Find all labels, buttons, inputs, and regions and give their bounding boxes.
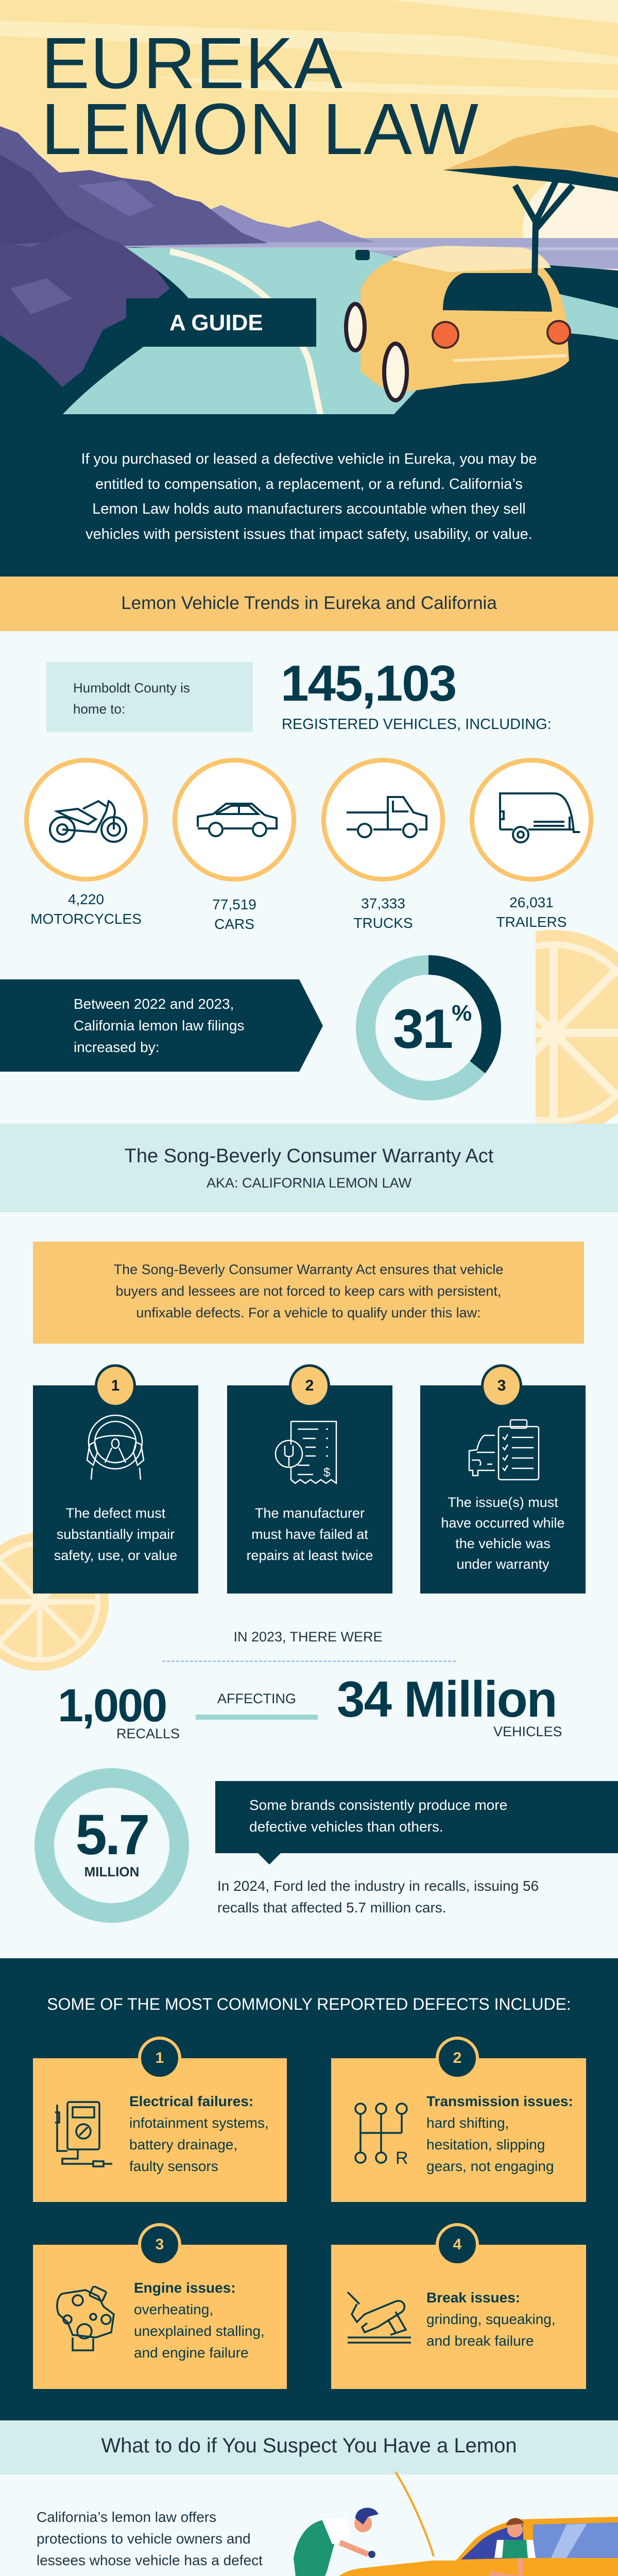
criteria card 3: under warranty xyxy=(456,1556,550,1572)
illustration: mechanic and car xyxy=(294,2471,618,2576)
text: ford recalls: recalls that affected 5.7 million cars. xyxy=(217,1900,447,1916)
callout arrow: filings xyxy=(0,979,323,1072)
intro text: entitled to compensation, a replacement, or a refund. California’s xyxy=(95,476,523,493)
section heading: song-beverly xyxy=(0,1124,618,1212)
recall stats: 34 Million xyxy=(337,1671,557,1727)
badge 4 xyxy=(436,2223,479,2266)
callout arrow: filings: increased by: xyxy=(74,1039,160,1055)
vehicle circles xyxy=(24,758,593,932)
callout arrow: filings: Between 2022 and 2023, xyxy=(74,996,234,1012)
badge 1: 1 xyxy=(156,2049,164,2066)
title xyxy=(41,22,479,170)
recall stats: IN 2023, THERE WERE xyxy=(233,1629,383,1645)
text: ford recalls: In 2024, Ford led the industry in recalls, issuing 56 xyxy=(217,1878,539,1894)
tree xyxy=(515,180,573,281)
humboldt box: Humboldt County is xyxy=(73,680,190,696)
title: LEMON LAW xyxy=(41,88,479,170)
song-beverly description box: buyers and lessees are not forced to keep cars with persistent, xyxy=(116,1283,501,1299)
defect card 2: hard shifting, xyxy=(426,2115,509,2131)
callout arrow: filings: California lemon law filings xyxy=(74,1018,244,1033)
section heading: song-beverly: The Song-Beverly Consumer Warranty Act xyxy=(125,1145,493,1167)
callout: brands: defective vehicles than others. xyxy=(249,1819,443,1835)
vehicle circles: TRAILERS xyxy=(496,914,566,930)
badge 1 xyxy=(95,1364,136,1408)
a guide label xyxy=(126,298,316,347)
icon: engine xyxy=(56,2286,115,2351)
song-beverly description box xyxy=(33,1242,584,1344)
labels: 4,220 xyxy=(68,891,104,907)
intro text: Lemon Law holds auto manufacturers accountable when they sell xyxy=(92,501,526,517)
defect card 3: overheating, xyxy=(134,2301,213,2317)
decoration: lemon slice right xyxy=(536,930,618,1124)
badge 3 xyxy=(138,2223,181,2266)
defect card 4: grinding, squeaking, xyxy=(426,2311,556,2327)
intro text: If you purchased or leased a defective vehicle in Eureka, you may be xyxy=(81,451,537,467)
song-beverly description box: The Song-Beverly Consumer Warranty Act ensures that vehicle xyxy=(114,1262,503,1277)
badge 3: 3 xyxy=(497,1377,506,1394)
recall stats: RECALLS xyxy=(116,1726,180,1741)
badge 1 xyxy=(138,2037,181,2080)
text: lemon law protections: protections to vehicle owners and xyxy=(37,2531,251,2547)
defect card 2: Transmission issues: xyxy=(426,2093,573,2109)
criteria card 1: safety, use, or value xyxy=(54,1548,177,1563)
icon: brake pedal xyxy=(347,2292,411,2344)
recall stats: VEHICLES xyxy=(493,1724,562,1739)
icon: gear shift: R xyxy=(396,2148,408,2168)
icon: steering wheel xyxy=(87,1415,144,1480)
title: EUREKA xyxy=(41,22,343,104)
defects heading: SOME OF THE MOST COMMONLY REPORTED DEFECTS INCLUDE: xyxy=(47,1995,571,2013)
labels: MOTORCYCLES xyxy=(30,911,142,927)
labels xyxy=(30,891,142,927)
stat: registered vehicles xyxy=(281,655,552,733)
icon: multimeter xyxy=(55,2101,112,2167)
defect card 4: and break failure xyxy=(426,2333,534,2349)
defect card 3: unexplained stalling, xyxy=(134,2323,265,2339)
criteria card 3: have occurred while xyxy=(441,1515,565,1531)
vehicle circles: 77,519 xyxy=(212,896,256,912)
intro panel xyxy=(0,414,618,577)
section heading: what to do: What to do if You Suspect You Have a Lemon xyxy=(101,2434,517,2457)
defect card 1: faulty sensors xyxy=(129,2158,218,2174)
section heading: song-beverly: AKA: CALIFORNIA LEMON LAW xyxy=(207,1175,411,1191)
hero illustration xyxy=(0,0,618,414)
text: ford recalls xyxy=(217,1878,539,1916)
defect card 4 xyxy=(331,2245,586,2389)
badge 1: 1 xyxy=(111,1377,119,1394)
defect card 2: gears, not engaging xyxy=(426,2158,554,2174)
a guide label: A GUIDE xyxy=(169,310,263,335)
song-beverly description box: unfixable defects. For a vehicle to qualify under this law: xyxy=(136,1305,481,1320)
panel: common defects xyxy=(0,1958,618,2420)
defect card 4: Break issues: xyxy=(426,2290,520,2306)
criteria card 3 xyxy=(420,1385,586,1594)
defect card 3 xyxy=(33,2245,287,2389)
ring stat 5.7 million: 5.7 xyxy=(76,1803,148,1867)
recall stats xyxy=(58,1629,562,1741)
criteria card 2: must have failed at xyxy=(251,1527,368,1542)
badge 3: 3 xyxy=(156,2236,164,2253)
badge 2 xyxy=(289,1364,330,1408)
defect card 1: Electrical failures: xyxy=(129,2093,253,2109)
section heading: what to do xyxy=(0,2420,618,2475)
intro text xyxy=(81,451,537,542)
icon: trailer xyxy=(470,758,593,882)
stat: registered vehicles: REGISTERED VEHICLES, INCLUDING: xyxy=(282,716,552,733)
badge 2: 2 xyxy=(453,2049,461,2066)
criteria card 1 xyxy=(33,1385,198,1594)
recall stats: AFFECTING xyxy=(217,1691,296,1706)
icon: car xyxy=(173,758,296,882)
defect card 2: hesitation, slipping xyxy=(426,2137,545,2153)
defect card 3: Engine issues: xyxy=(134,2280,236,2296)
ring stat 5.7 million: MILLION xyxy=(84,1864,139,1879)
icon: gear shift xyxy=(354,2103,408,2168)
car xyxy=(360,255,569,393)
badge 3 xyxy=(481,1364,522,1408)
donut chart 31%: 31% xyxy=(393,997,470,1060)
text: lemon law protections: California’s lemon law offers xyxy=(37,2509,216,2525)
donut chart 31% xyxy=(356,955,501,1100)
criteria card 3: The issue(s) must xyxy=(448,1495,558,1510)
icon: motorcycle xyxy=(24,758,148,882)
vehicle circles: CARS xyxy=(214,916,254,932)
number badges defects xyxy=(138,2037,479,2263)
icon: truck xyxy=(321,758,445,882)
section heading: trends xyxy=(0,577,618,631)
icon: car clipboard xyxy=(469,1419,540,1481)
callout: brands: Some brands consistently produce more xyxy=(249,1797,507,1813)
intro text: vehicles with persistent issues that impact safety, usability, or value. xyxy=(85,526,533,542)
text: lemon law protections: lessees whose vehicle has a defect xyxy=(37,2552,263,2568)
section heading: trends: Lemon Vehicle Trends in Eureka and California xyxy=(121,593,497,613)
criteria card 2: The manufacturer xyxy=(255,1505,365,1521)
criteria card 1: substantially impair xyxy=(57,1527,175,1542)
vehicle circles: 26,031 xyxy=(509,894,554,910)
criteria card 1: The defect must xyxy=(66,1505,165,1521)
defect card 1: infotainment systems, xyxy=(129,2115,269,2131)
decoration: lemon slice left xyxy=(0,1533,109,1671)
criteria card 2 xyxy=(227,1385,392,1594)
humboldt box xyxy=(46,662,253,732)
badge 4: 4 xyxy=(453,2236,461,2253)
criteria card 3: the vehicle was xyxy=(455,1536,551,1551)
text: lemon law protections xyxy=(37,2509,263,2576)
defect card 3: and engine failure xyxy=(134,2345,249,2361)
vehicle circles: TRUCKS xyxy=(353,915,413,931)
icon: wrench receipt xyxy=(275,1421,337,1485)
stat: registered vehicles: 145,103 xyxy=(281,655,456,711)
callout: brands xyxy=(215,1781,618,1865)
defect card 2 xyxy=(331,2058,586,2202)
criteria card 2: repairs at least twice xyxy=(246,1548,373,1563)
badge 2 xyxy=(436,2037,479,2080)
humboldt box: home to: xyxy=(73,701,125,717)
vehicle circles: 37,333 xyxy=(361,895,405,911)
defect card 1: battery drainage, xyxy=(129,2137,237,2153)
badge 2: 2 xyxy=(305,1377,314,1394)
recall stats: 1,000 xyxy=(58,1680,166,1732)
icon: wrench receipt: $ xyxy=(323,1466,330,1480)
defect card 1 xyxy=(33,2058,287,2202)
ring stat 5.7 million xyxy=(35,1768,189,1923)
number badges criteria xyxy=(95,1364,522,1405)
